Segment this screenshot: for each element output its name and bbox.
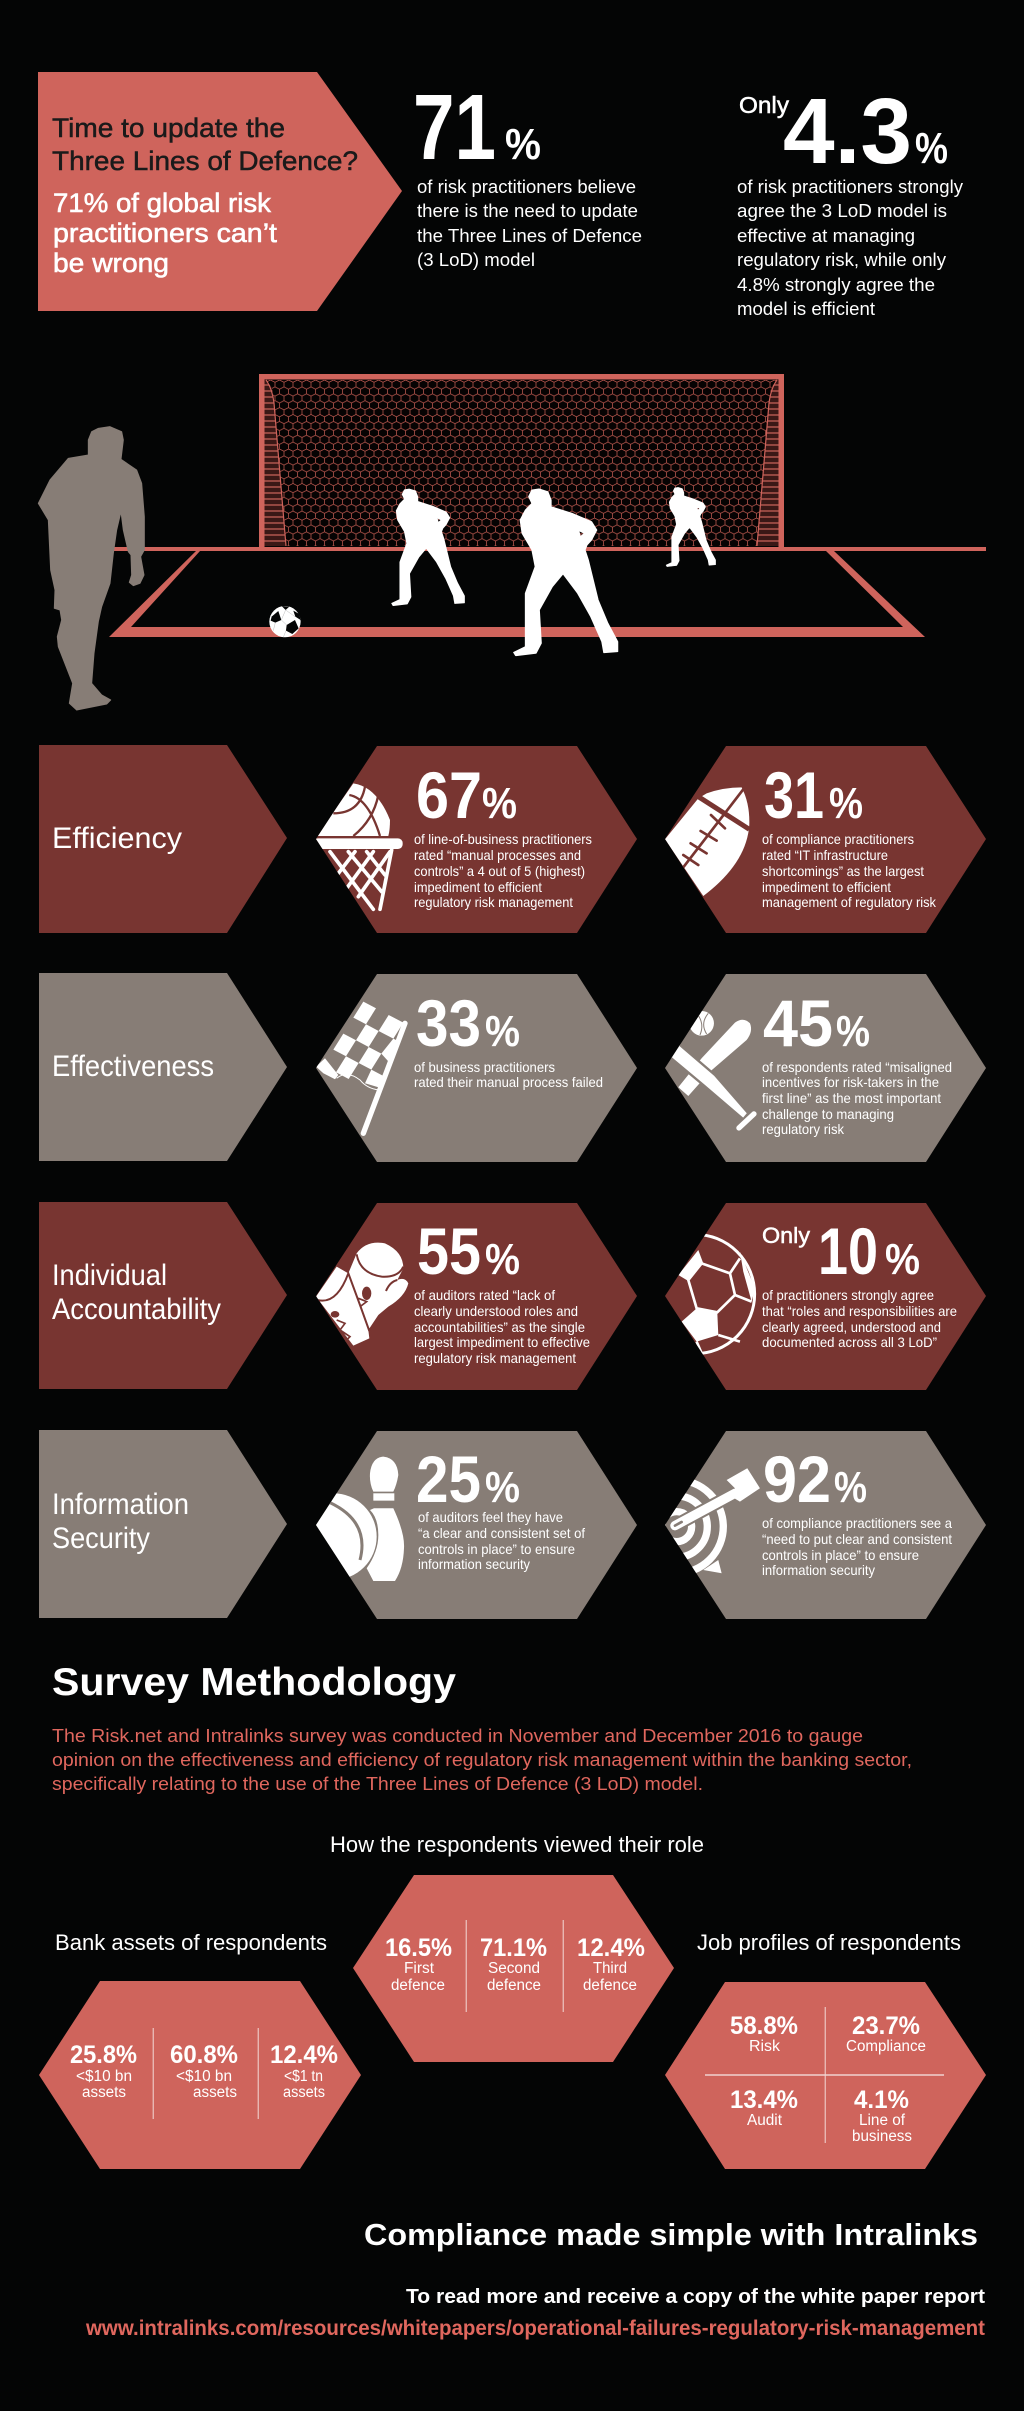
stat description: clearly agreed, understood and [762,1319,941,1335]
panel: information security label [39,1430,287,1618]
banner heading [52,113,358,176]
first defence [385,1934,452,1994]
illustration: football goal scene [38,374,986,710]
footer link: www.intralinks.com/resources/whitepapers/operational-failures-regulatory-risk-management [85,2317,985,2340]
assets group three [270,2041,338,2101]
stat: only 4.3 percent strongly agree: 4.8% strongly agree the [737,275,935,295]
stat description: of auditors rated “lack of [414,1287,555,1303]
panel: security stat 92 percent: % [834,1463,867,1512]
first defence: defence [391,1977,445,1994]
goalkeeper left [392,489,464,606]
panel: individual accountability label [39,1202,287,1389]
panel: information security label: Information [52,1488,189,1521]
panel: efficiency label: Efficiency [52,822,182,855]
goal frame [259,374,784,551]
icon: boxing gloves [316,1243,408,1346]
stat: only 4.3 percent strongly agree: regulatory risk, while only [737,250,946,270]
footer call to action: To read more and receive a copy of the white paper report [406,2286,985,2308]
stat number: 25 [416,1442,481,1516]
stat: only 4.3 percent strongly agree: 4.3 [783,79,912,183]
assets group two: assets [193,2084,237,2101]
goal line [114,547,986,551]
banner subheading: be wrong [53,248,169,278]
footer heading: Compliance made simple with Intralinks [364,2217,978,2252]
second defence: defence [487,1977,541,1994]
third defence: defence [583,1977,637,1994]
stat description: impediment to efficient [414,879,542,895]
panel: efficiency stat 31 percent [665,746,986,933]
stat description: rated their manual process failed [414,1074,603,1090]
panel: accountability stat 55 percent [316,1203,637,1390]
stat description: “need to put clear and consistent [762,1531,952,1547]
stat number: 45 [763,986,833,1060]
stat: only 4.3 percent strongly agree: agree the 3 LoD model is [737,201,947,221]
panel: bank assets hexagon [39,1981,361,2169]
assets group three: <$1 tn [284,2068,323,2085]
stat description: of business practitioners [414,1059,555,1075]
stat description: “a clear and consistent set of [418,1525,585,1541]
text block: survey description: The Risk.net and Intralinks survey was conducted in November and December 2016 to gauge [52,1726,863,1746]
third defence: Third [593,1960,627,1977]
stat: 71 percent need to update: the Three Lines of Defence [417,226,642,246]
panel: efficiency stat 67 percent [313,746,637,933]
stat description: first line” as the most important [762,1090,941,1106]
stat description: largest impediment to effective [414,1334,590,1350]
panel: accountability stat only 10 percent: 10 [818,1214,878,1288]
stat description [418,1509,585,1572]
audit: Audit [747,2112,783,2129]
stat description: incentives for risk-takers in the [762,1074,939,1090]
assets group one: assets [82,2084,126,2101]
line of business [852,2086,912,2145]
stat description [414,1287,590,1366]
panel: security stat 25 percent [290,1431,637,1619]
banner subheading [53,188,278,278]
stat description: regulatory risk [762,1121,845,1137]
stat: 71 percent need to update: of risk practitioners believe [417,177,636,197]
stat description: controls in place” to ensure [418,1541,575,1557]
panel: efficiency label [39,745,287,933]
stat number: 33 [416,986,481,1060]
panel: accountability stat 55 percent: % [485,1235,520,1284]
icon: american football [665,787,749,896]
panel: respondent roles hexagon [353,1875,674,2062]
icon: chequered flag [316,1002,405,1133]
panel: job profiles hexagon [665,1982,986,2169]
panel: effectiveness stat 45 percent: % [836,1007,870,1056]
icon: bowling pin and ball [316,1456,404,1581]
goalkeeper far right [666,487,715,567]
risk: 58.8% [730,2012,798,2040]
stat description: rated “manual processes and [414,847,581,863]
second defence [480,1934,547,1994]
panel: information security label: Security [52,1522,150,1555]
stat description [762,1059,952,1137]
assets group three: assets [283,2084,325,2101]
panel: effectiveness stat 33 percent [316,974,637,1162]
banner subheading: practitioners can’t [53,218,278,248]
text block: survey description: opinion on the effectiveness and efficiency of regulatory risk management within the banking sector, [52,1750,912,1770]
stat: only 4.3 percent strongly agree: Only [739,92,790,118]
stat description: rated “IT infrastructure [762,847,888,863]
audit [730,2086,798,2129]
panel: individual accountability label: Accountability [52,1293,221,1326]
stat description: challenge to managing [762,1106,894,1122]
assets group three: 12.4% [270,2041,338,2069]
stat description: of practitioners strongly agree [762,1287,934,1303]
banner heading: Three Lines of Defence? [52,146,358,176]
compliance [846,2012,926,2055]
football [269,606,301,637]
stat description: of compliance practitioners [762,831,914,847]
icon: target and arrow [665,1468,760,1574]
stat description: management of regulatory risk [762,894,937,910]
second defence: Second [488,1960,540,1977]
third defence: 12.4% [577,1934,645,1962]
stat: 71 percent need to update: (3 LoD) model [417,250,535,270]
panel: efficiency stat 67 percent: % [482,779,517,828]
stat description: shortcomings” as the largest [762,863,924,879]
stat: 71 percent need to update: there is the need to update [417,201,638,221]
stat number: 92 [763,1442,831,1516]
stat description: of line-of-business practitioners [414,831,592,847]
assets group one: 25.8% [70,2041,137,2069]
icon: basketball hoop [313,783,403,909]
panel: effectiveness label: Effectiveness [52,1050,214,1083]
assets group one [70,2041,137,2101]
stat description: regulatory risk management [414,1350,576,1366]
panel: effectiveness label [39,973,287,1161]
text block: survey description [52,1726,912,1794]
stat: 71 percent need to update: % [505,120,541,169]
stat: only 4.3 percent strongly agree [737,79,963,319]
compliance: Compliance [846,2038,926,2055]
stat number: 55 [417,1214,481,1288]
stat: only 4.3 percent strongly agree: model is efficient [737,299,875,319]
stat: only 4.3 percent strongly agree: effective at managing [737,226,915,246]
stat number: 67 [416,758,482,832]
text block: survey description: specifically relating to the use of the Three Lines of Defence (3 LoD) model. [52,1774,703,1794]
stat description: information security [762,1562,875,1578]
panel: accountability stat only 10 percent: % [885,1235,920,1284]
risk: Risk [749,2038,780,2055]
stat description: documented across all 3 LoD” [762,1334,937,1350]
penalty taker silhouette [38,427,144,710]
stat: 71 percent need to update [413,75,642,270]
stat description: accountabilities” as the single [414,1319,585,1335]
panel: security stat 92 percent [630,1431,986,1619]
panel: accountability stat only 10 percent [635,1203,986,1390]
stat description: impediment to efficient [762,879,891,895]
stat description [762,1287,957,1350]
icon: soccer ball [678,1234,756,1354]
stat description: controls in place” to ensure [762,1547,919,1563]
panel: security stat 25 percent: % [485,1463,520,1512]
penalty box [109,551,925,637]
stat description: information security [418,1556,530,1572]
first defence: 16.5% [385,1934,452,1962]
icon: baseball bats and ball [663,1011,754,1128]
line of business: 4.1% [854,2086,909,2114]
stat number: Only [762,1223,810,1248]
heading: job profiles of respondents: Job profiles of respondents [697,1930,961,1955]
stat number: 31 [764,758,824,832]
stat description: that “roles and responsibilities are [762,1303,957,1319]
stat description: clearly understood roles and [414,1303,578,1319]
assets group one: <$10 bn [76,2068,132,2085]
stat: 71 percent need to update: 71 [413,75,496,179]
stat description: of auditors feel they have [418,1509,563,1525]
stat description: regulatory risk management [414,894,573,910]
goal net [264,380,779,546]
stat: only 4.3 percent strongly agree: % [915,124,948,173]
assets group two: <$10 bn [176,2068,232,2085]
stat description [414,1059,603,1090]
heading: bank assets of respondents: Bank assets of respondents [55,1930,327,1955]
goalkeeper centre [514,489,617,656]
stat description: of respondents rated “misaligned [762,1059,952,1075]
risk [730,2012,798,2055]
panel: individual accountability label: Individual [52,1259,167,1292]
audit: 13.4% [730,2086,798,2114]
panel: effectiveness stat 33 percent: % [485,1007,520,1056]
first defence: First [404,1960,435,1977]
stat description: controls” a 4 out of 5 (highest) [414,863,585,879]
stat description: of compliance practitioners see a [762,1515,952,1531]
stat description [762,831,937,910]
banner arrow shape [38,72,402,311]
assets group two [170,2041,238,2101]
heading: survey methodology: Survey Methodology [52,1661,456,1704]
stat description [414,831,592,910]
heading: how the respondents viewed their role: How the respondents viewed their role [330,1832,704,1857]
panel: efficiency stat 31 percent: % [829,779,863,828]
line of business: Line of [859,2112,906,2129]
panel: effectiveness stat 45 percent [663,974,986,1162]
line of business: business [852,2128,912,2145]
banner subheading: 71% of global risk [53,188,271,218]
compliance: 23.7% [852,2012,920,2040]
stat description [762,1515,952,1578]
stat: only 4.3 percent strongly agree: of risk practitioners strongly [737,177,963,197]
second defence: 71.1% [480,1934,547,1962]
banner heading: Time to update the [52,113,285,143]
panel: title banner [38,72,402,311]
third defence [577,1934,645,1994]
assets group two: 60.8% [170,2041,238,2069]
